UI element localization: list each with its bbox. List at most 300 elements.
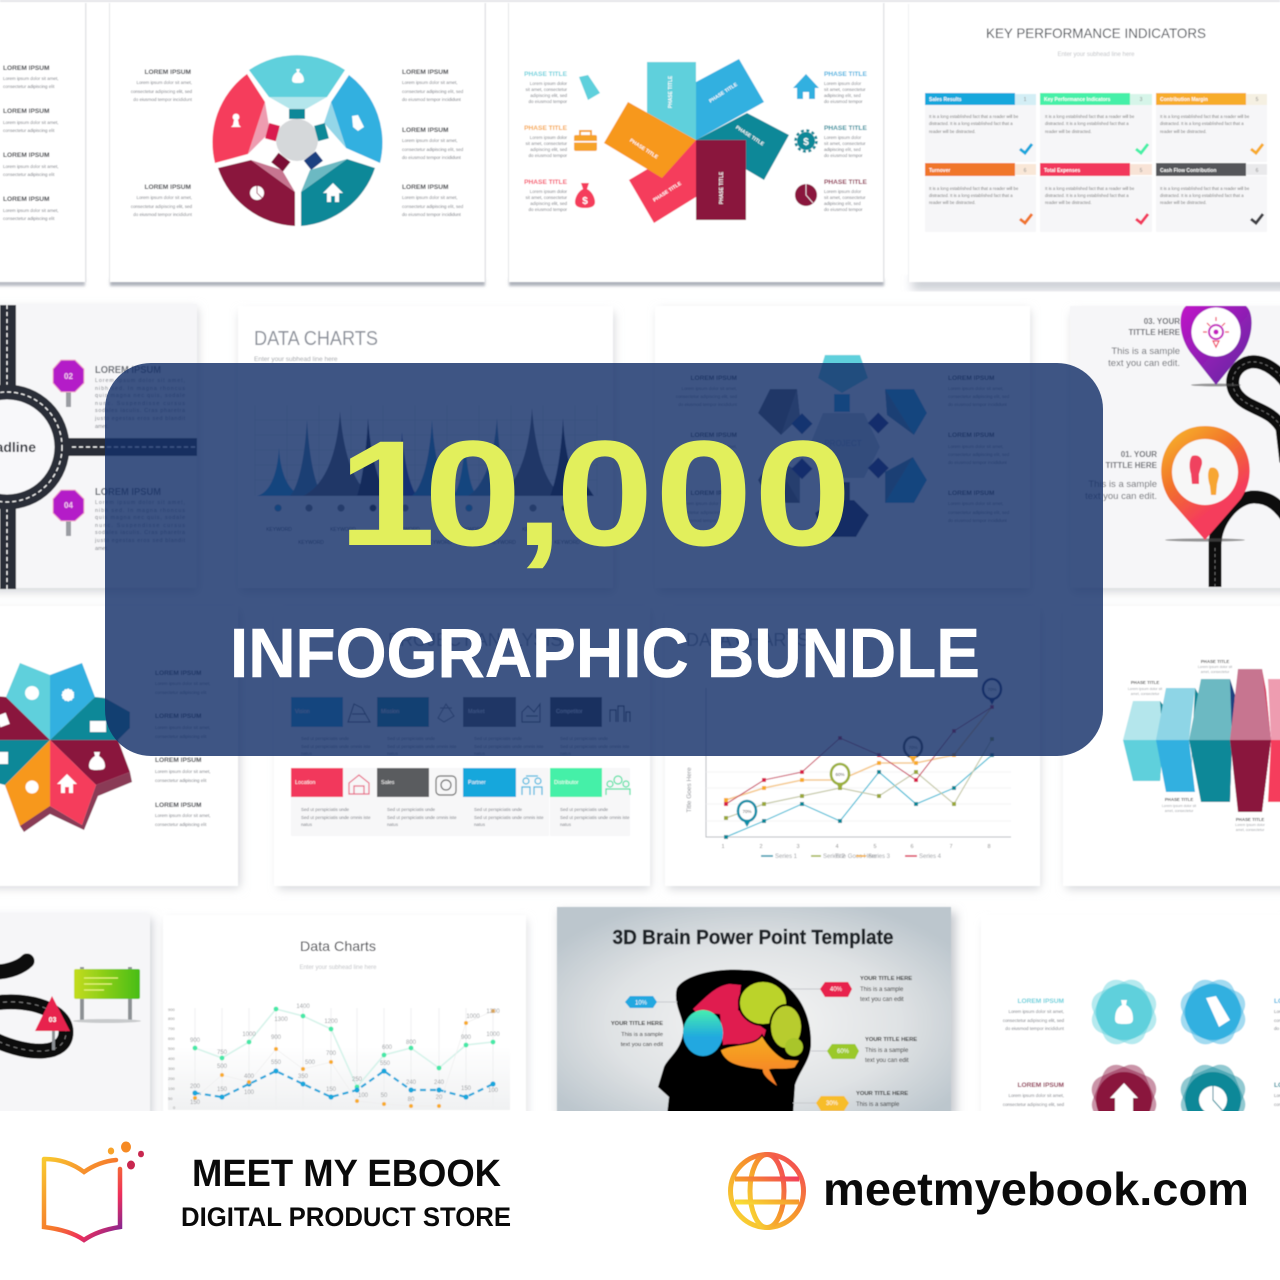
chart: segmented wheel	[212, 55, 382, 226]
panel: 3D brain slide	[557, 907, 956, 1118]
panel: lorem list slide, row 1 left: LOREM IPSUM	[3, 65, 50, 72]
footer background	[0, 1111, 1280, 1280]
callout: left tag	[625, 996, 677, 1008]
text block: brain right 1	[860, 976, 912, 1003]
chart: three series: 1300	[486, 1009, 500, 1015]
chart: four series line chart: 2	[759, 844, 763, 850]
callout: yellow tag: 30%	[826, 1101, 839, 1107]
sign: red triangle	[35, 996, 70, 1050]
chart: head with brain lobes	[658, 970, 811, 1115]
banner title: INFOGRAPHIC BUNDLE	[230, 614, 980, 692]
chart: 3D bands: amet, consectetur	[1131, 692, 1160, 696]
text blocks: flower: consectetur adipiscing elit	[155, 690, 207, 695]
road: branch	[60, 438, 197, 456]
text blocks: flower: Lorem ipsum dolor sit amet,	[155, 725, 211, 730]
text block: road item 02: amet.	[95, 424, 108, 430]
chart: four series line chart: 3	[796, 844, 800, 850]
sign: green board	[73, 967, 141, 1023]
text blocks: hub right: consectetur adipiscing elit, sed	[948, 510, 1010, 515]
text block: brain right 1: YOUR TITLE HERE	[860, 976, 912, 982]
icon: pie	[795, 184, 817, 206]
footer icon: globe	[730, 1154, 804, 1228]
callout: yellow tag	[793, 1096, 849, 1111]
text blocks: phases right: PHASE TITLE	[824, 125, 867, 132]
text block: brain left: YOUR TITLE HERE	[611, 1021, 663, 1027]
text blocks: flower: consectetur adipiscing elit	[155, 822, 207, 827]
text blocks: hub right: do eiusmod tempor incididunt	[948, 402, 1008, 407]
panel: key performance indicators slide	[908, 4, 1280, 290]
analysis cards: Market	[468, 709, 485, 715]
analysis cards: natus	[301, 751, 313, 756]
text block: brain right 1: text you can edit	[860, 997, 904, 1003]
text blocks: flower: LOREM IPSUM	[155, 802, 202, 809]
text blocks: phases left	[524, 71, 568, 212]
icon: gear	[796, 130, 816, 152]
chart: three series: 800	[406, 1040, 417, 1046]
sign: red triangle: 03	[49, 1017, 56, 1024]
chart legend: Title Goes Here	[835, 854, 877, 860]
text block: brain left: This is a sample	[621, 1032, 663, 1038]
chart: 3D bands: amet, consectetur	[1236, 828, 1265, 832]
KPI card grid: 5	[1140, 168, 1143, 174]
road: lower curve	[1215, 497, 1280, 587]
text blocks: hub left: LOREM IPSUM	[690, 490, 737, 497]
text block: badges left: consectetur adipiscing elit, sed	[1003, 1018, 1064, 1023]
chart: four series line chart: 5	[873, 844, 877, 850]
chart: three series: 0	[173, 1105, 176, 1110]
analysis cards: Sed ut perspiciatis unde omnis iste	[560, 815, 630, 820]
chart: three series: 100	[244, 1090, 255, 1096]
panel: line chart slide	[665, 606, 1040, 889]
text blocks: flower: Lorem ipsum dolor sit amet,	[155, 769, 211, 774]
panel: lorem list slide, row 1 left: consectetur adipiscing elit	[3, 128, 55, 133]
text blocks: phases left: adipiscing elit, sed	[530, 201, 567, 206]
text blocks: wheel left: Lorem ipsum dolor sit amet,	[136, 80, 192, 85]
text blocks: phases right: sit amet, consectetur	[824, 195, 866, 200]
KPI card grid	[925, 93, 1267, 232]
chart legend: Series 3	[868, 854, 891, 860]
KPI card grid: 6	[1256, 168, 1259, 174]
chart: 3D bands: amet, consectetur	[1201, 670, 1230, 674]
text block: brain right 1: This is a sample	[860, 987, 904, 993]
chart: three series: 800	[168, 1016, 175, 1021]
chart: four series line chart: 1	[721, 844, 725, 850]
chart: three series: 50	[168, 1096, 173, 1101]
chart: 3D bands: PHASE TITLE	[1165, 797, 1193, 802]
text block: brain right 3: YOUR TITLE HERE	[856, 1091, 908, 1097]
text blocks: phases left: PHASE TITLE	[524, 125, 568, 132]
text blocks: wheel right: do eiusmod tempor incididunt	[402, 97, 462, 102]
panel: lorem list slide, row 1 left: consectetur adipiscing elit	[3, 84, 55, 89]
chart: phase star: PHASE TITLE	[734, 125, 765, 148]
text blocks: phases left: Lorem ipsum dolor	[530, 135, 568, 140]
chart: spike chart: KEYWORD	[298, 540, 324, 546]
KPI card grid: reader will be distracted.	[929, 129, 976, 134]
analysis cards: natus	[560, 751, 572, 756]
text blocks: hub right: consectetur adipiscing elit, sed	[948, 394, 1010, 399]
KPI card grid: reader will be distracted.	[1160, 129, 1207, 134]
KPI card grid: Contribution Margin	[1160, 97, 1208, 103]
analysis cards: Partner	[468, 780, 486, 786]
text block: road item 02	[94, 365, 186, 430]
analysis cards: Sed ut perspiciatis unde	[560, 736, 609, 741]
banner panel	[105, 363, 1103, 756]
road: ring	[0, 392, 62, 502]
panel: lorem list slide, row 1 left: Lorem ipsum dolor sit amet,	[3, 76, 59, 81]
KPI card grid: Key Performance Indicators	[1044, 97, 1111, 103]
text blocks: wheel right: do eiusmod tempor incididunt	[402, 212, 462, 217]
chart: four series line chart: 70%	[908, 745, 918, 750]
panel: lorem list slide, row 1 left: consectetur adipiscing elit	[3, 172, 55, 177]
text blocks: phases right: adipiscing elit, sed	[824, 93, 861, 98]
heading: data charts faint: DATA CHARTS	[686, 630, 809, 650]
chart: three series: 550	[380, 1061, 391, 1067]
road: vertical	[0, 305, 16, 589]
subtitle: data charts: Enter your subhead line here	[254, 356, 338, 363]
analysis cards: natus	[387, 751, 399, 756]
analysis cards	[291, 697, 630, 836]
chart: three series: 150	[190, 1100, 201, 1106]
KPI card grid: It is a long established fact that a reader will be	[1160, 186, 1250, 191]
text blocks: flower: consectetur adipiscing elit	[155, 734, 207, 739]
chart: three series: 100	[358, 1093, 369, 1099]
analysis cards: Sed ut perspiciatis unde omnis iste	[474, 744, 544, 749]
analysis cards: Sed ut perspiciatis unde	[387, 736, 436, 741]
chart: three series: 1300	[274, 1017, 288, 1023]
analysis cards: Sales	[381, 780, 395, 786]
text blocks: wheel left: do eiusmod tempor incididunt	[133, 97, 193, 102]
analysis cards: Location	[295, 780, 315, 786]
chart: 3D bands: amet, consectetur	[1165, 809, 1194, 813]
text block: badges right	[1274, 998, 1280, 1107]
chart: phase star: PHASE TITLE	[719, 171, 725, 204]
analysis cards: Sed ut perspiciatis unde	[560, 807, 609, 812]
chart: 3D bands: Lorem ipsum dolor sit	[1198, 665, 1232, 669]
panel: hexagon hub slide	[655, 306, 1030, 592]
KPI card grid: distracted. It is a long established fact that a	[929, 121, 1013, 126]
icon: blue house	[793, 74, 819, 99]
chart: four series line chart: 8	[987, 844, 991, 850]
text blocks: wheel right: LOREM IPSUM	[402, 184, 449, 191]
icon: orange map pin	[1161, 426, 1250, 540]
big number: 10,000	[338, 409, 852, 577]
KPI card grid: Total Expenses	[1044, 168, 1081, 174]
KPI card grid: reader will be distracted.	[1045, 200, 1092, 205]
icon: tag badge	[1176, 975, 1250, 1049]
chart: 3D bands: PHASE TITLE	[1236, 817, 1264, 822]
text blocks: hub left: Lorem ipsum dolor sit amet,	[681, 501, 737, 506]
chart: hexagonal flower	[0, 663, 132, 832]
text blocks: flower: Lorem ipsum dolor sit amet,	[155, 681, 211, 686]
chart: three series: 400	[168, 1056, 175, 1061]
footer tagline: DIGITAL PRODUCT STORE	[181, 1202, 511, 1232]
chart: three series: 600	[168, 1036, 175, 1041]
text blocks: phases left: Lorem ipsum dolor	[530, 189, 568, 194]
text blocks: hub right: Lorem ipsum dolor sit amet,	[948, 386, 1004, 391]
pin shadow lower	[1165, 538, 1245, 542]
panel: project analysis slide	[274, 606, 650, 889]
chart legend: Series 4	[919, 854, 942, 860]
chart: spike chart: KEYWORD	[490, 540, 516, 546]
analysis cards: Sed ut perspiciatis unde	[474, 807, 523, 812]
KPI card grid: Sales Results	[929, 97, 962, 103]
icon: money bag: $	[582, 196, 588, 207]
text blocks: wheel left: do eiusmod tempor incididunt	[133, 212, 193, 217]
icon: price tag	[579, 75, 600, 100]
analysis cards: Sed ut perspiciatis unde	[301, 736, 350, 741]
chart: three series: 240	[434, 1080, 445, 1086]
text blocks: phases left: sit amet, consectetur	[525, 195, 567, 200]
text block: brain left	[611, 1021, 663, 1048]
chart: three series: 900	[271, 1035, 282, 1041]
chart: three series: 150	[461, 1086, 472, 1092]
pin shadow top	[1191, 384, 1241, 386]
chart: three series: 200	[168, 1076, 175, 1081]
chart: spike chart: KEYWORD	[394, 527, 420, 533]
chart: phase star	[604, 59, 789, 223]
text block: badges left: do eiusmod tempor incididunt	[1005, 1026, 1065, 1031]
chart: hexagon hub: PROJECT	[824, 439, 862, 448]
text blocks: phases right: adipiscing elit, sed	[824, 147, 861, 152]
text block: brain right 3: This is a sample	[856, 1102, 900, 1108]
text block: pin 01: text you can edit.	[1085, 491, 1157, 502]
chart: 3D bands: Lorem ipsum dolor sit	[1128, 687, 1162, 691]
callout: green tag	[811, 1044, 859, 1059]
chart: four series line chart: 60%	[835, 772, 845, 777]
chart: three series: 700	[326, 1051, 337, 1057]
text blocks: hub right: Lorem ipsum dolor sit amet,	[948, 501, 1004, 506]
text blocks: wheel right: Lorem ipsum dolor sit amet,	[402, 80, 458, 85]
text blocks: hub left: consectetur adipiscing elit, sed	[676, 510, 737, 515]
text blocks: phases right: do eiusmod tempor	[824, 99, 863, 104]
text blocks: hub left: do eiusmod tempor incididunt	[678, 402, 738, 407]
chart: three series: 500	[305, 1060, 316, 1066]
panel: lorem list slide, row 1 left: LOREM IPSUM	[3, 196, 50, 203]
text block: pin 01: This is a sample	[1088, 479, 1157, 490]
text blocks: hub left: Lorem ipsum dolor sit amet,	[681, 444, 737, 449]
text blocks: phases right: sit amet, consectetur	[824, 87, 866, 92]
KPI card grid: reader will be distracted.	[929, 200, 976, 205]
chart: three series: 240	[406, 1080, 417, 1086]
text blocks: phases right: adipiscing elit, sed	[824, 201, 861, 206]
icon: money bag badge	[1087, 975, 1161, 1049]
text blocks: hub left	[676, 375, 738, 523]
chart: spike chart: KEYWORD	[522, 527, 548, 533]
text blocks: hub right: LOREM IPSUM	[948, 375, 995, 382]
text block: road item 04	[94, 487, 186, 552]
text blocks: wheel right: do eiusmod tempor incididunt	[402, 155, 462, 160]
chart: three series: 1200	[324, 1019, 338, 1025]
analysis cards: Sed ut perspiciatis unde	[301, 807, 350, 812]
text blocks: wheel left: Lorem ipsum dolor sit amet,	[136, 195, 192, 200]
text blocks: phases right: do eiusmod tempor	[824, 207, 863, 212]
chart: four series line chart: 6	[910, 844, 914, 850]
text blocks: phases right: Lorem ipsum dolor	[824, 135, 862, 140]
text block: pin 01: 01. YOUR	[1121, 450, 1157, 459]
text blocks: phases left: do eiusmod tempor	[528, 207, 567, 212]
text block: road item 04: sodales iaculis. Cras pharetra	[95, 530, 185, 536]
chart: 3D bands: Lorem ipsum dolor	[1235, 823, 1266, 827]
text block: road item 02: nunc. Suspendisse cursus	[95, 401, 185, 407]
panel: lorem list slide, row 1 left: LOREM IPSUM	[3, 152, 50, 159]
KPI card grid: It is a long established fact that a reader will be	[929, 186, 1019, 191]
KPI card grid: 1	[1024, 97, 1027, 103]
footer logo: open book	[44, 1142, 144, 1240]
chart: spike chart: KEYWORD	[426, 540, 452, 546]
text block: brain right 2: text you can edit	[865, 1058, 909, 1064]
text blocks: hub left: LOREM IPSUM	[690, 432, 737, 439]
text blocks: phases left: do eiusmod tempor	[528, 99, 567, 104]
text blocks: flower: LOREM IPSUM	[155, 713, 202, 720]
chart: three series: 900	[461, 1035, 472, 1041]
text blocks: phases left: do eiusmod tempor	[528, 153, 567, 158]
text block: road item 04: quis magna nec quis, sodale	[95, 515, 185, 521]
panel: lorem list slide, row 1 left: Lorem ipsum dolor sit amet,	[3, 120, 59, 125]
panel: lorem list slide, row 1 left	[0, 3, 86, 286]
chart: three series: 1400	[296, 1004, 310, 1010]
panel: five-part wheel slide	[109, 3, 486, 286]
KPI card grid: 3	[1140, 97, 1143, 103]
analysis cards: Mission	[381, 709, 399, 715]
panel: map pin road slide	[1070, 306, 1280, 592]
text block: brain right 2: This is a sample	[865, 1048, 909, 1054]
panel: data charts slide	[238, 306, 614, 592]
chart: three series: 200	[190, 1084, 201, 1090]
analysis cards: Sed ut perspiciatis unde omnis iste	[387, 744, 457, 749]
text block: road item 02: nibh sed. In magna rhoncus	[95, 386, 185, 392]
text block: road item 04: nunc. Suspendisse cursus	[95, 523, 185, 529]
road: winding	[0, 961, 66, 1051]
heading: project analysis: PROJECT ANALYSIS	[388, 630, 562, 650]
heading: KPI: KEY PERFORMANCE INDICATORS	[986, 25, 1206, 41]
banner	[105, 363, 1103, 756]
chart: three series: 700	[168, 1026, 175, 1031]
KPI card grid: distracted. It is a long established fact that a	[1045, 121, 1129, 126]
sign: 04	[53, 490, 84, 536]
chart: three series: 900	[168, 1007, 175, 1012]
text blocks: phases right: PHASE TITLE	[824, 179, 867, 186]
KPI card grid: It is a long established fact that a reader will be	[929, 114, 1019, 119]
sign: 02	[53, 360, 84, 407]
KPI card grid: reader will be distracted.	[1160, 200, 1207, 205]
chart: three series	[168, 1004, 510, 1110]
chart: four series line chart: 7	[949, 844, 953, 850]
text block: badges left: LOREM IPSUM	[1017, 1082, 1064, 1089]
chart: three series: 1000	[466, 1014, 480, 1020]
chart: three series: 300	[168, 1066, 175, 1071]
analysis cards: natus	[474, 751, 486, 756]
panel: badge icons slide	[981, 915, 1280, 1134]
text blocks: flower: LOREM IPSUM	[155, 757, 202, 764]
chart: 3D bands: PHASE TITLE	[1201, 659, 1229, 664]
KPI card grid: 6	[1024, 168, 1027, 174]
chart: 3D bands: Lorem ipsum dolor sit	[1162, 804, 1196, 808]
chart: three series: 900	[190, 1038, 201, 1044]
chart: three series: 20	[436, 1095, 443, 1101]
chart: three series: 150	[217, 1087, 228, 1093]
text block: road item 02: Lorem ipsum dolor sit amet,	[95, 378, 186, 384]
chart: three series: 1000	[486, 1032, 500, 1038]
chart: phase star: PHASE TITLE	[652, 180, 683, 204]
text block: pin 01: TITTLE HERE	[1105, 461, 1158, 470]
text blocks: hub right: consectetur adipiscing elit, sed	[948, 452, 1010, 457]
text blocks: wheel left: LOREM IPSUM	[144, 184, 191, 191]
text block: badges left: Lorem ipsum dolor sit amet,	[1008, 1093, 1064, 1098]
text block: pin 03	[1108, 317, 1181, 369]
text blocks: hub right: Lorem ipsum dolor sit amet,	[948, 444, 1004, 449]
chart: three series: 600	[382, 1045, 393, 1051]
road: upper curve	[1233, 362, 1280, 462]
text block: pin 03: TITTLE HERE	[1128, 328, 1181, 337]
KPI card grid: Turnover	[929, 168, 950, 174]
chart: three series: 150	[326, 1087, 337, 1093]
text blocks: flower: Lorem ipsum dolor sit amet,	[155, 813, 211, 818]
text blocks: hub right	[948, 375, 1010, 523]
panel: lorem list slide, row 1 left: LOREM IPSUM	[3, 108, 50, 115]
text block: road item 04: nibh sed. In magna rhoncus	[95, 508, 185, 514]
text blocks: phases right: PHASE TITLE	[824, 71, 867, 78]
callout: green tag: 60%	[837, 1049, 850, 1055]
chart: three series: 250	[352, 1077, 363, 1083]
text blocks: phases left: PHASE TITLE	[524, 71, 568, 78]
text blocks: hub right: LOREM IPSUM	[948, 490, 995, 497]
chart: phase star: PHASE TITLE	[668, 75, 674, 108]
heading: data charts: Data Charts	[300, 938, 376, 954]
footer website: meetmyebook.com	[823, 1163, 1249, 1215]
callout: red tag: 40%	[830, 987, 843, 993]
chart: four series line chart: 70%	[987, 687, 997, 692]
chart: four series line chart	[686, 679, 1011, 860]
KPI card grid: distracted. It is a long established fact that a	[929, 193, 1013, 198]
chart: 3D bands	[1123, 659, 1280, 832]
analysis cards: Sed ut perspiciatis unde omnis iste	[560, 744, 630, 749]
chart: three series: 80	[408, 1097, 415, 1103]
text blocks: wheel right: Lorem ipsum dolor sit amet,	[402, 138, 458, 143]
text blocks: wheel right: consectetur adipiscing elit, sed	[402, 204, 464, 209]
panel: lorem list slide, row 1 left: Lorem ipsum dolor sit amet,	[3, 208, 59, 213]
text blocks: flower: LOREM IPSUM	[155, 670, 202, 677]
text block: pin 01	[1085, 450, 1158, 502]
KPI card grid: Cash Flow Contribution	[1160, 168, 1216, 174]
text blocks: wheel right	[402, 69, 464, 217]
text block: road item 02: quis magna nec quis, sodale	[95, 393, 185, 399]
text blocks: hub left: Lorem ipsum dolor sit amet,	[681, 386, 737, 391]
text blocks: phases right: Lorem ipsum dolor	[824, 189, 862, 194]
chart: spike chart: KEYWORD	[362, 540, 388, 546]
heading: data charts: DATA CHARTS	[254, 328, 378, 350]
chart legend: Series 1	[775, 854, 798, 860]
callout: left tag: 10%	[635, 1000, 648, 1006]
sign: 02: 02	[64, 372, 73, 381]
chart: four series line chart: 4	[835, 844, 839, 850]
analysis cards: Distributor	[554, 780, 579, 786]
chart legend: Series 2	[823, 854, 846, 860]
icon: money bag	[575, 183, 595, 208]
KPI card grid: distracted. It is a long established fact that a	[1045, 193, 1129, 198]
text block: brain right 2	[865, 1037, 917, 1064]
chart: three series: 100	[488, 1088, 499, 1094]
chart: three series: 500	[168, 1046, 175, 1051]
heading: brain: 3D Brain Power Point Template	[612, 927, 894, 949]
text blocks: wheel left: consectetur adipiscing elit, sed	[131, 89, 192, 94]
chart: three series: 550	[271, 1060, 282, 1066]
footer brand name: MEET MY EBOOK	[192, 1153, 502, 1195]
chart: three series: 1000	[242, 1032, 256, 1038]
chart: 3D bands: PHASE TITLE	[1131, 680, 1159, 685]
text blocks: wheel left: consectetur adipiscing elit, sed	[131, 204, 192, 209]
chart: spike chart: KEYWORD	[330, 527, 356, 533]
text block: brain right 2: YOUR TITLE HERE	[865, 1037, 917, 1043]
